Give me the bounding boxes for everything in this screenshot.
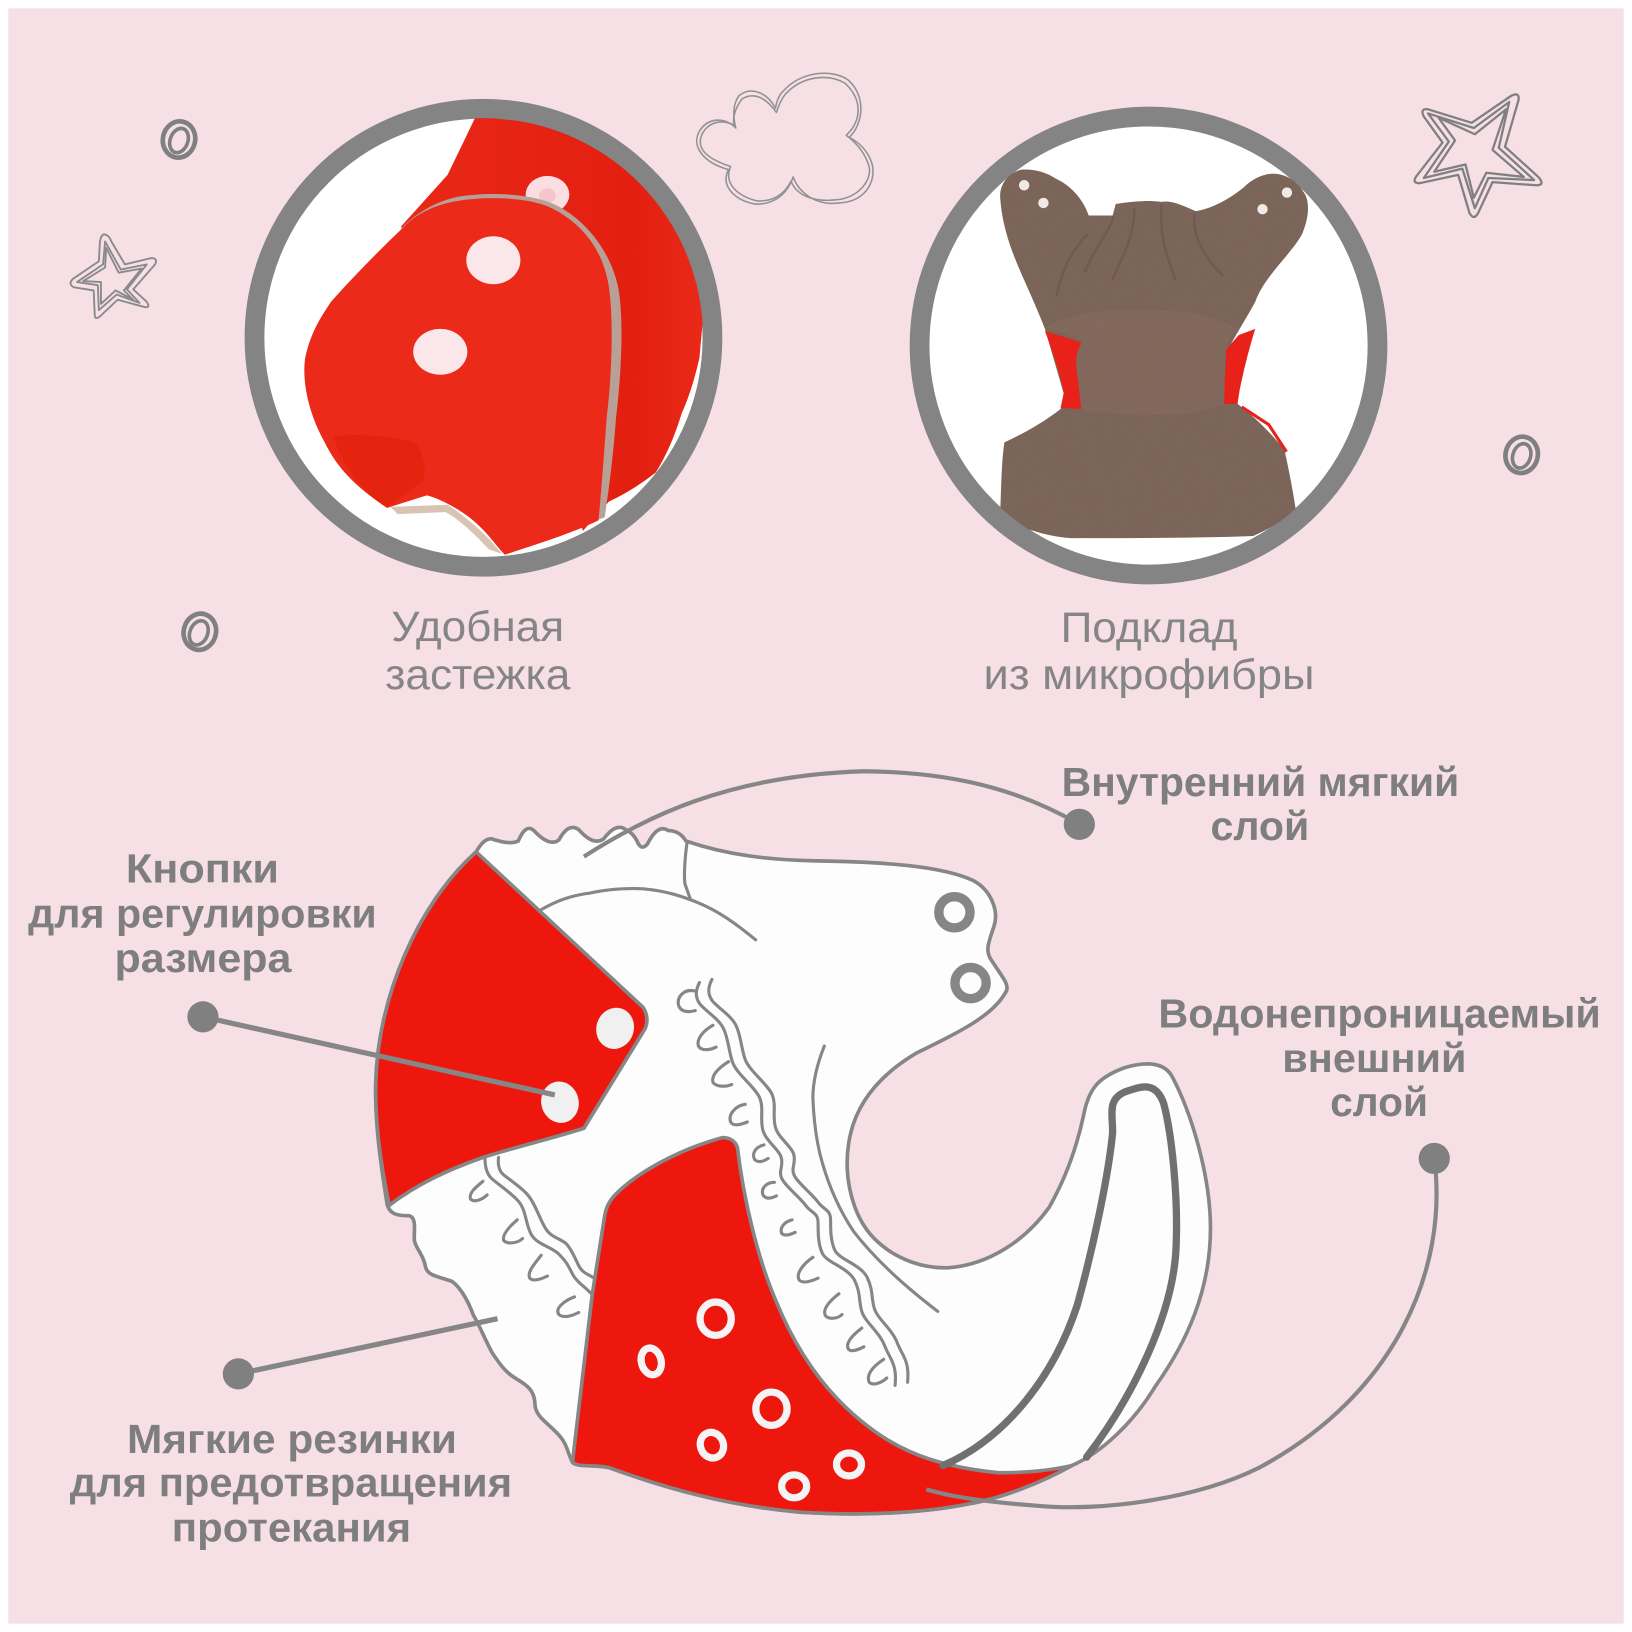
- folded flap: [1045, 310, 1239, 415]
- bottom lining strip: [390, 505, 502, 554]
- caption: closure: застежка: [385, 651, 571, 699]
- label: waterproof outer layer: внешний: [1282, 1035, 1467, 1081]
- decorative star right: [1415, 94, 1542, 217]
- thin seam lines: [485, 843, 938, 1385]
- caption: closure: Удобная: [391, 603, 564, 651]
- left panel snap upper: [591, 1003, 639, 1054]
- pocket fold: [333, 435, 425, 508]
- decorative swirl right: [1502, 434, 1541, 476]
- front flap: [304, 198, 612, 555]
- label: size snaps: для регулировки: [28, 890, 377, 936]
- label: size snaps: размера: [114, 935, 292, 981]
- red edge sliver: [1242, 407, 1286, 452]
- snap: top: [526, 176, 570, 208]
- left panel snap lower: [536, 1077, 583, 1127]
- caption: lining: из микрофибры: [984, 651, 1315, 699]
- label: soft elastics: для предотвращения: [70, 1460, 512, 1506]
- label: waterproof outer layer: слой: [1330, 1079, 1428, 1125]
- photo circle: microfiber lining: [920, 117, 1378, 575]
- leader: soft elastics: [223, 1319, 498, 1389]
- decorative swirl top left: [159, 118, 199, 161]
- decorative star left: [70, 234, 156, 318]
- red side left: [1045, 331, 1081, 409]
- red side right: [1224, 329, 1255, 404]
- back panel of diaper: [401, 117, 723, 531]
- leader: inner soft layer: [584, 771, 1095, 857]
- decorative cloud: [697, 73, 873, 204]
- label: waterproof outer layer: Водонепроницаемый: [1158, 990, 1601, 1036]
- snaps on lining: [1019, 180, 1292, 214]
- snap holes on lower panel: [638, 1302, 861, 1498]
- label: soft elastics: протекания: [172, 1504, 411, 1550]
- diaper illustration: [376, 827, 1210, 1514]
- diaper body outline: [376, 827, 1210, 1514]
- caption: lining: Подклад: [1061, 604, 1238, 652]
- stitch marks: [470, 991, 887, 1384]
- fold wrinkles: [1056, 204, 1223, 297]
- leader: waterproof outer layer: [926, 1143, 1450, 1507]
- leader: size snaps: [187, 1001, 555, 1095]
- label: soft elastics: Мягкие резинки: [127, 1416, 457, 1462]
- grey inner edge of flap: [401, 194, 621, 526]
- label: inner soft layer: слой: [1210, 803, 1309, 849]
- left red waist panel: [376, 852, 647, 1205]
- lower red panel: [572, 1138, 1072, 1514]
- photo circle: snap closure: [254, 109, 723, 567]
- thick inner leg gather: [943, 1087, 1177, 1465]
- snap: middle: [466, 236, 520, 284]
- snap: lower: [413, 329, 467, 375]
- brown lining body: [1000, 169, 1308, 538]
- label: size snaps: Кнопки: [126, 846, 279, 892]
- decorative swirl bottom left: [180, 610, 220, 654]
- tab snap rings: [939, 897, 986, 999]
- label: inner soft layer: Внутренний мягкий: [1062, 759, 1459, 805]
